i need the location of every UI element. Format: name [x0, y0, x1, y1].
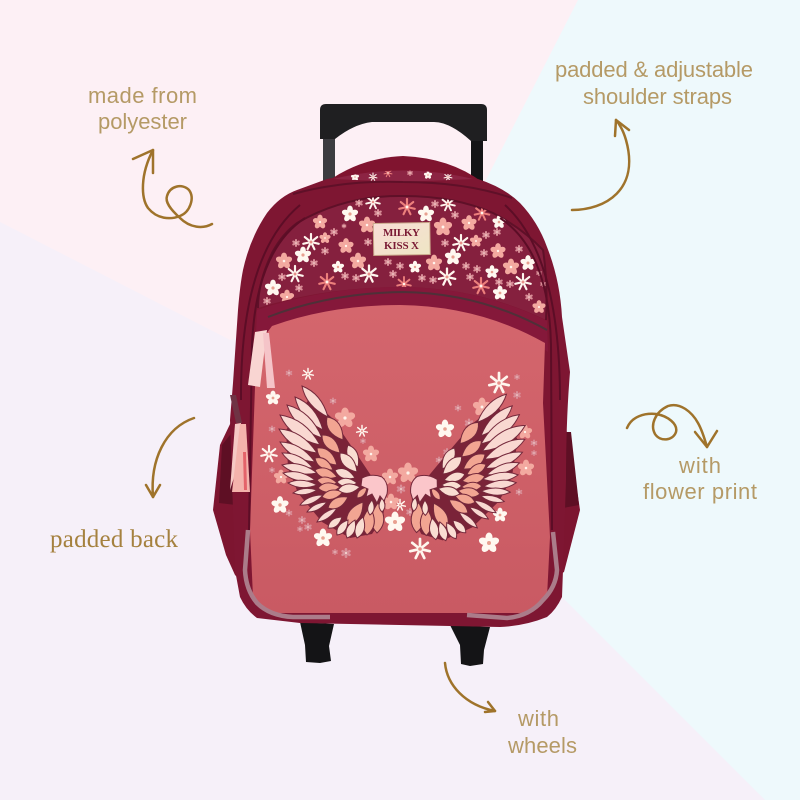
trolley wheels — [300, 622, 490, 666]
label: padded and adjustable shoulder straps: shoulder straps — [583, 84, 732, 109]
label: with wheels — [507, 706, 577, 758]
label: padded back: padded back — [50, 526, 178, 553]
zipper — [268, 292, 547, 330]
zip band — [256, 287, 548, 352]
label: with flower print: with — [678, 453, 721, 478]
side pockets — [213, 420, 580, 590]
flower print — [264, 195, 546, 314]
left wing — [276, 383, 387, 540]
arrow: flower print — [627, 405, 717, 447]
wing print — [261, 368, 536, 558]
shoulder piping — [293, 182, 512, 198]
arrow: made from polyester — [133, 150, 212, 227]
label: made from polyester: polyester — [98, 109, 187, 134]
backpack — [213, 156, 580, 627]
arrow: padded back — [146, 418, 194, 497]
reflective trim — [245, 530, 557, 618]
front pink panel — [250, 305, 550, 613]
top strip flowers — [350, 170, 452, 181]
brand text line two: KISS X — [384, 240, 419, 252]
label: with wheels: with — [517, 706, 559, 731]
tassel — [230, 395, 250, 492]
top flower strip — [334, 170, 472, 181]
trolley handle — [320, 104, 487, 184]
arrow: shoulder straps — [572, 120, 629, 210]
label: with flower print: flower print — [643, 479, 757, 504]
label: made from polyester — [88, 83, 197, 134]
label: padded and adjustable shoulder straps — [555, 57, 753, 109]
scattered flowers around wings — [261, 368, 536, 558]
backpack body — [230, 171, 570, 627]
floral panel — [258, 195, 547, 320]
label: padded and adjustable shoulder straps: padded & adjustable — [555, 57, 753, 82]
arrow: with wheels — [445, 663, 495, 712]
label: with wheels: wheels — [507, 733, 577, 758]
zip pulls — [248, 330, 275, 388]
right wing — [405, 382, 533, 550]
brand label — [373, 222, 430, 255]
label: with flower print — [643, 453, 757, 504]
top carry padding — [327, 156, 482, 195]
label: made from polyester: made from — [88, 83, 197, 108]
side piping — [241, 205, 560, 530]
brand text line one: MILKY — [383, 227, 420, 239]
